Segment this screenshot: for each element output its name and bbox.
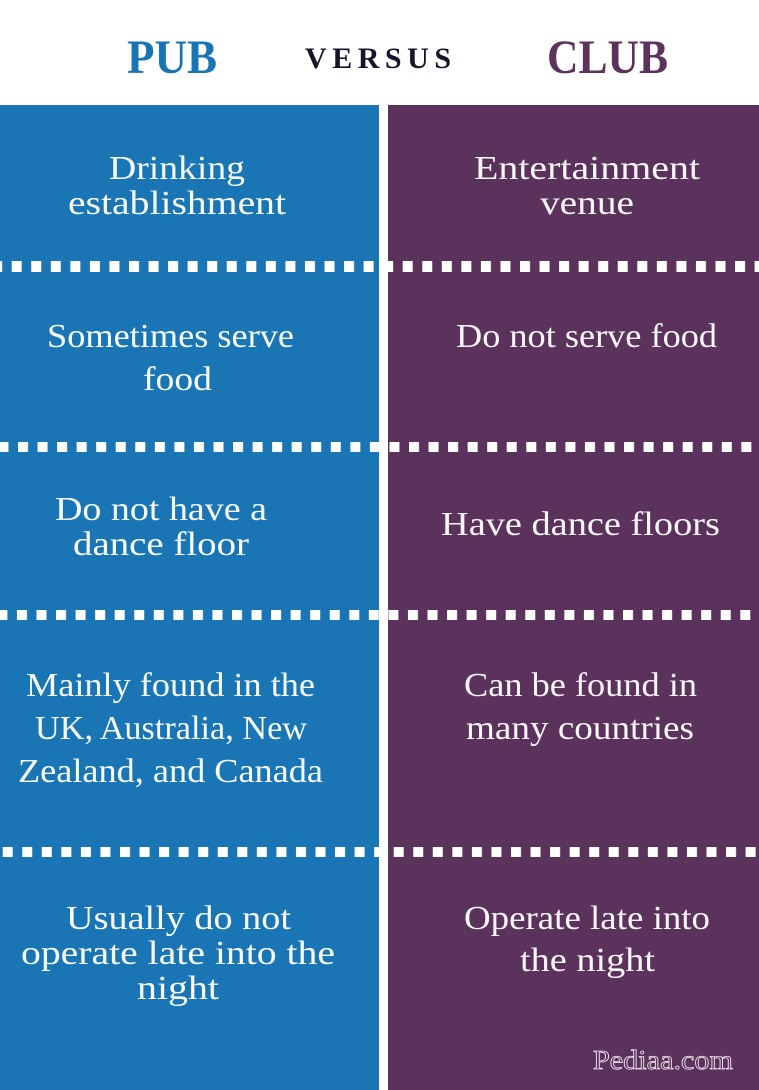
text: sometimes serve food: Sometimes serve: [47, 318, 294, 355]
text: can be found in many countries: Can be found in: [464, 667, 697, 704]
text: usually do not operate late: operate late into the: [21, 935, 335, 972]
panel: club column: [388, 105, 759, 1090]
text: do not have a dance floor: [55, 491, 267, 563]
text: mainly found in UK, Australia, New Zealand, Canada: UK, Australia, New: [35, 710, 307, 747]
text: can be found in many countries: many countries: [466, 710, 694, 747]
text: have dance floors: Have dance floors: [441, 506, 720, 543]
heading: VERSUS: VERSUS: [305, 42, 451, 75]
text: entertainment venue: [474, 150, 701, 222]
watermark: Pediaa.com: Pediaa.com: [593, 1045, 733, 1075]
text: entertainment venue: venue: [540, 185, 634, 222]
text: operate late into the night: the night: [520, 942, 656, 979]
text: operate late into the night: Operate late into: [464, 900, 710, 937]
text: sometimes serve food: food: [143, 361, 212, 398]
text: drinking establishment: [68, 150, 287, 222]
text: usually do not operate late: [21, 900, 335, 1007]
text: mainly found in UK, Australia, New Zealand, Canada: [18, 667, 323, 790]
text: drinking establishment: Drinking: [109, 150, 245, 187]
text: do not have a dance floor: dance floor: [73, 526, 250, 563]
text: usually do not operate late: Usually do not: [66, 900, 292, 937]
text: usually do not operate late: night: [137, 970, 220, 1007]
text: sometimes serve food: [47, 318, 294, 398]
heading: PUB: PUB: [127, 31, 217, 84]
heading: CLUB: CLUB: [547, 31, 668, 84]
panel: pub column: [0, 105, 379, 1090]
text: do not serve food: Do not serve food: [456, 318, 717, 355]
text: entertainment venue: Entertainment: [474, 150, 701, 187]
text: operate late into the night: [464, 900, 710, 979]
text: can be found in many countries: [464, 667, 697, 747]
text: mainly found in UK, Australia, New Zealand, Canada: Mainly found in the: [26, 667, 315, 704]
text: mainly found in UK, Australia, New Zealand, Canada: Zealand, and Canada: [18, 753, 323, 790]
text: drinking establishment: establishment: [68, 185, 287, 222]
text: do not have a dance floor: Do not have a: [55, 491, 267, 528]
